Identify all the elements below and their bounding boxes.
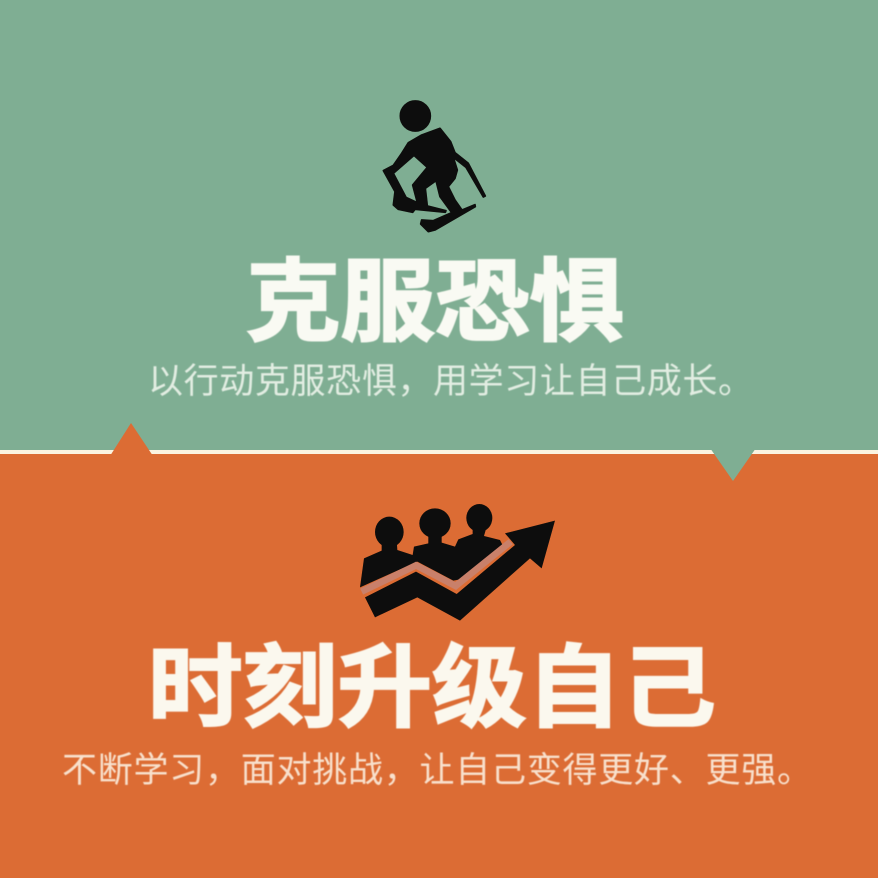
text: subtitle bottom: 不断学习，面对挑战，让自己变得更好、更强。 xyxy=(62,751,812,790)
divider line xyxy=(0,450,878,454)
panel: top green background xyxy=(0,0,878,452)
heading: 时刻升级自己: 时刻升级自己 xyxy=(148,639,716,739)
heading: 克服恐惧: 克服恐惧 xyxy=(246,253,624,353)
arrow: orange pointer up xyxy=(110,423,153,456)
icon: climbing figure xyxy=(383,101,485,232)
icon: group with rising arrow xyxy=(360,504,555,621)
text: subtitle top: 以行动克服恐惧，用学习让自己成长。 xyxy=(148,362,753,401)
panel: bottom orange background xyxy=(0,452,878,878)
icon part: pink stripe xyxy=(362,542,511,592)
arrow: green pointer down xyxy=(710,448,756,481)
icon part: three people silhouettes xyxy=(360,504,503,587)
icon part: rising zigzag arrow xyxy=(365,521,555,621)
